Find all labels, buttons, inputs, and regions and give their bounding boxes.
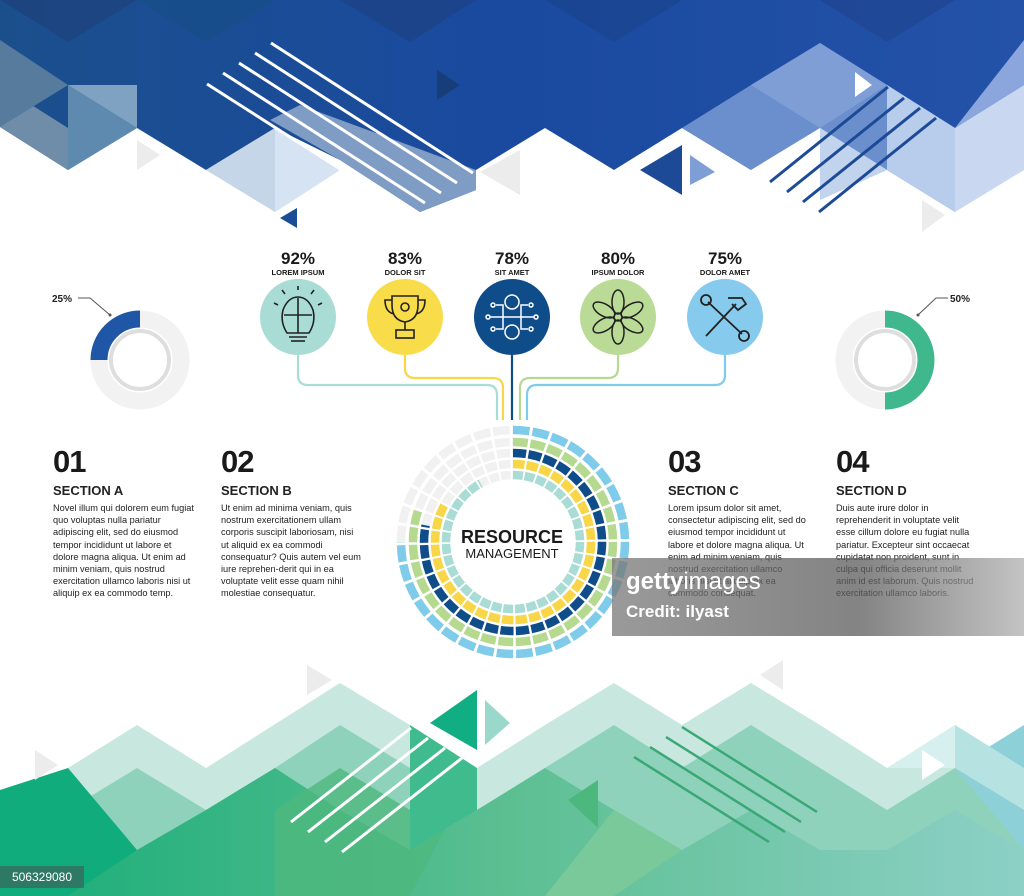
icon: lightbulb — [260, 279, 336, 355]
text: DOLOR SIT — [385, 268, 425, 277]
section D: Duis aute irure dolor in reprehenderit in voluptate velit esse cillum dolore eu fugiat nulla pariatur. Excepteur sint occaecat cupidatat non proident, sunt in culpa qui officia deserunt mollit anim id est laborum. Quis nostrud exercitation ullamco laboris. — [836, 503, 973, 598]
image id: 506329080 — [12, 870, 72, 884]
text: SIT AMET — [495, 268, 529, 277]
section D: SECTION D — [836, 483, 907, 498]
text: IPSUM DOLOR — [592, 268, 644, 277]
donut right 50%: 50% — [950, 294, 970, 305]
bottom stripes right — [634, 727, 817, 842]
section B: SECTION B — [221, 483, 292, 498]
bottom band: green triangles — [0, 660, 1024, 896]
section A: Novel illum qui dolorem eum fugiat quo voluptas nulla pariatur adipiscing elit, sed do eiusmod tempor incididunt ut labore et dolore magna aliqua. Ut enim ad minim veniam, quis nostrud exercitation ullamco laboris nisi ut aliquip ex ea commodo temp. — [53, 503, 194, 598]
bottom stripes left — [291, 728, 462, 852]
percent labels: 92% — [281, 249, 315, 268]
section B: Ut enim ad minima veniam, quis nostrum exercitationem ullam corporis suscipit laboriosam, nisi ut aliquid ex ea commodi consequatur? Quis autem vel eum iure reprehen-derit qui in ea voluptate velit esse quam nihil molestiae consequatur. — [221, 503, 361, 598]
percent labels: LOREM IPSUM — [272, 268, 324, 277]
section A: SECTION A — [53, 483, 123, 498]
donut left 25%: 25% — [52, 294, 72, 305]
icon circles — [260, 279, 763, 355]
ring title: RESOURCE — [461, 527, 563, 547]
icon: trophy — [367, 279, 443, 355]
icon: leaves — [580, 279, 656, 355]
text: 83% — [388, 249, 422, 268]
section C: Lorem ipsum dolor sit amet, consectetur adipiscing elit, sed do eiusmod tempor incididunt ut labore et dolore magna aliqua. Ut enim ad minim veniam, quis nostrud exercitation ullamco laboris nisi ut aliquip ex ea commodo consequat. — [668, 503, 806, 598]
section A: 01 — [53, 444, 85, 479]
text: 75% — [708, 249, 742, 268]
section C: 03 — [668, 444, 700, 479]
icon: tools — [687, 279, 763, 355]
top band: blue triangles — [0, 0, 1024, 232]
percent labels — [272, 249, 324, 277]
donut left 25% — [52, 294, 181, 401]
section C — [668, 444, 806, 598]
top stripes right — [770, 87, 936, 212]
text: DOLOR AMET — [700, 268, 750, 277]
connectors — [298, 355, 725, 420]
section C: SECTION C — [668, 483, 739, 498]
text: 78% — [495, 249, 529, 268]
icon: network people — [474, 279, 550, 355]
section D — [836, 444, 973, 598]
watermark — [612, 558, 1024, 636]
watermark: gettyimages — [626, 568, 761, 595]
top stripes left — [207, 43, 473, 213]
section D: 04 — [836, 444, 868, 479]
ring title — [461, 527, 563, 561]
ring title: MANAGEMENT — [465, 546, 559, 561]
image id — [0, 866, 84, 888]
section B: 02 — [221, 444, 253, 479]
text: 80% — [601, 249, 635, 268]
section B — [221, 444, 361, 598]
donut right 50% — [844, 294, 970, 401]
watermark: Credit: ilyast — [626, 602, 729, 621]
section A — [53, 444, 194, 598]
ring chart: resource management — [401, 430, 625, 654]
